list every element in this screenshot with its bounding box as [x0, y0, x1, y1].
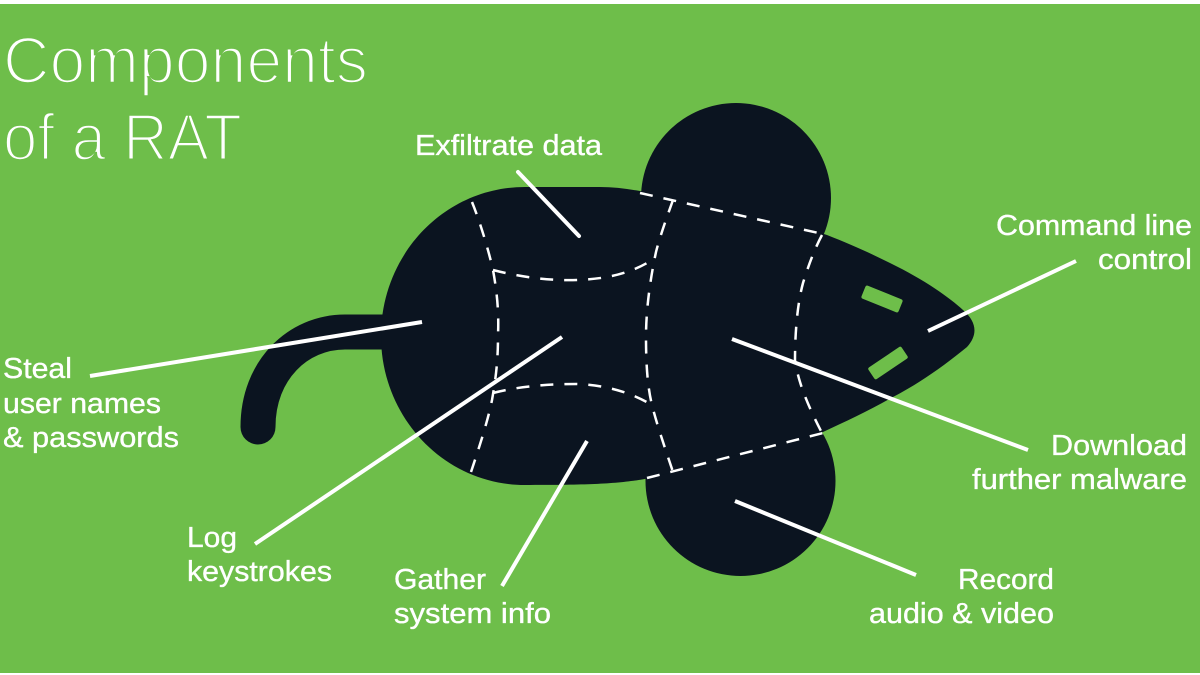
upper ear [641, 103, 831, 293]
nostril bottom [868, 346, 908, 380]
leader line: gather system info [502, 441, 587, 586]
label: steal user names and passwords: Steal [3, 353, 72, 385]
leader line: command line control [928, 261, 1076, 331]
label: gather system info: system info [394, 598, 551, 630]
leader line: record audio and video [735, 501, 916, 575]
label: download further malware: further malware [972, 464, 1187, 496]
label: steal user names and passwords: & passwords [3, 422, 179, 454]
label: steal user names and passwords [3, 353, 179, 454]
leader line: log keystrokes [255, 337, 562, 544]
title: of a RAT [3, 100, 242, 174]
title: Components [3, 23, 368, 97]
label: log keystrokes: Log [187, 522, 237, 554]
label: gather system info [394, 564, 551, 630]
label: steal user names and passwords: user names [3, 388, 161, 420]
title [3, 23, 368, 174]
label: log keystrokes [187, 522, 332, 588]
label: record audio and video: audio & video [869, 598, 1054, 630]
label: download further malware [972, 430, 1187, 496]
nostril top [861, 285, 903, 313]
label: gather system info: Gather [394, 564, 486, 596]
mouse body [381, 187, 974, 485]
dashed section lines [471, 193, 823, 478]
leader line: download further malware [732, 339, 1028, 450]
mouse illustration [258, 103, 974, 576]
leader line: steal credentials [90, 322, 422, 376]
label: record audio and video [869, 564, 1054, 630]
label: exfiltrate data: Exfiltrate data [415, 130, 603, 162]
label: command line control: control [1098, 244, 1192, 276]
label: log keystrokes: keystrokes [187, 556, 332, 588]
lower ear [646, 386, 836, 576]
label: command line control [996, 210, 1192, 276]
label: download further malware: Download [1051, 430, 1187, 462]
leader line: exfiltrate data [518, 172, 579, 236]
label: command line control: Command line [996, 210, 1192, 242]
mouse tail [258, 332, 390, 427]
label: record audio and video: Record [958, 564, 1054, 596]
